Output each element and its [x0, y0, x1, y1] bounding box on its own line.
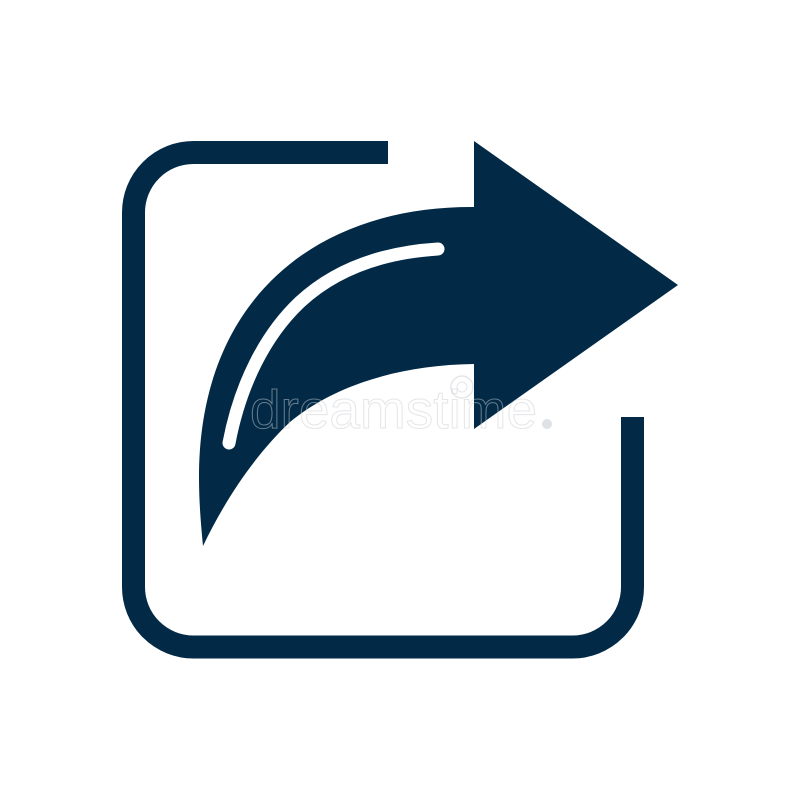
icon: curved arrow [199, 141, 678, 546]
icon: arrow highlight [229, 249, 438, 443]
watermark: dreamstime [250, 380, 537, 440]
icon: open rounded square frame [134, 152, 632, 647]
